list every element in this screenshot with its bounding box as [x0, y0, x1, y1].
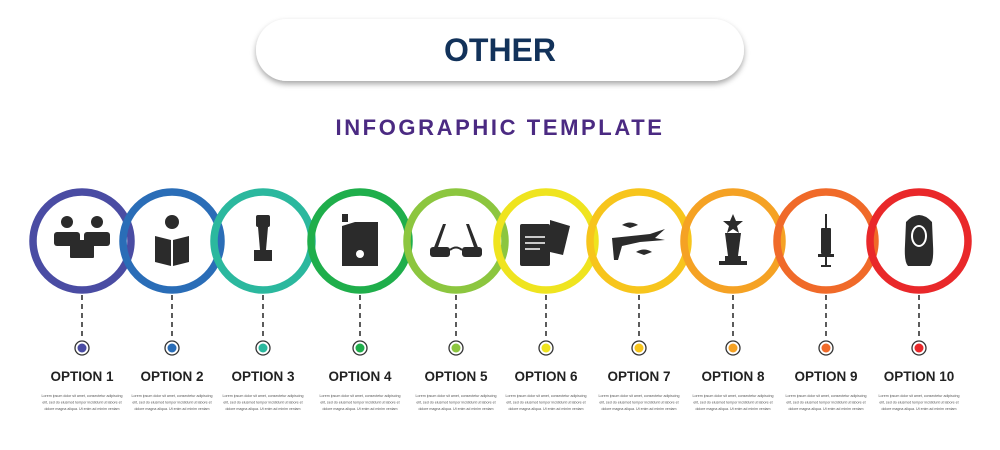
option 3: dolore magna aliqua. Ut enim ad minim veniam: [225, 407, 301, 411]
option 8: [684, 192, 782, 411]
option 2: dolore magna aliqua. Ut enim ad minim veniam: [134, 407, 210, 411]
option 9: elit, sed do eiusmod tempor incididunt ut labore et: [786, 400, 866, 404]
icon: birds on branch: [612, 222, 665, 260]
icon: fuel can: [342, 214, 378, 266]
option 5: elit, sed do eiusmod tempor incididunt ut labore et: [416, 400, 496, 404]
option 5: [407, 192, 505, 411]
option 7: dolore magna aliqua. Ut enim ad minim veniam: [601, 407, 677, 411]
option 2: OPTION 2: [140, 369, 204, 384]
icon: glasses: [430, 224, 482, 257]
option 7: elit, sed do eiusmod tempor incididunt ut labore et: [599, 400, 679, 404]
option 3: elit, sed do eiusmod tempor incididunt ut labore et: [223, 400, 303, 404]
option 1: Lorem ipsum dolor sit amet, consectetur adipiscing: [42, 394, 122, 398]
option 10: elit, sed do eiusmod tempor incididunt ut labore et: [879, 400, 959, 404]
option 2: elit, sed do eiusmod tempor incididunt ut labore et: [132, 400, 212, 404]
option 10: dolore magna aliqua. Ut enim ad minim veniam: [881, 407, 957, 411]
subtitle: INFOGRAPHIC TEMPLATE: [335, 115, 665, 140]
icon: person reading: [155, 215, 189, 266]
option 6: Lorem ipsum dolor sit amet, consectetur adipiscing: [506, 394, 586, 398]
option 3: OPTION 3: [231, 369, 295, 384]
option 9: [777, 192, 875, 411]
icon: hijab: [905, 215, 933, 266]
option 8: elit, sed do eiusmod tempor incididunt ut labore et: [693, 400, 773, 404]
option 7: OPTION 7: [607, 369, 671, 384]
option 9: Lorem ipsum dolor sit amet, consectetur adipiscing: [786, 394, 866, 398]
title pill: [256, 19, 744, 81]
option 4: OPTION 4: [328, 369, 392, 384]
option 6: dolore magna aliqua. Ut enim ad minim veniam: [508, 407, 584, 411]
option 8: Lorem ipsum dolor sit amet, consectetur adipiscing: [693, 394, 773, 398]
option 4: elit, sed do eiusmod tempor incididunt ut labore et: [320, 400, 400, 404]
option 4: dolore magna aliqua. Ut enim ad minim veniam: [322, 407, 398, 411]
option 8: OPTION 8: [701, 369, 765, 384]
option 10: Lorem ipsum dolor sit amet, consectetur adipiscing: [879, 394, 959, 398]
option 4: Lorem ipsum dolor sit amet, consectetur adipiscing: [320, 394, 400, 398]
option 9: OPTION 9: [794, 369, 858, 384]
option 2: Lorem ipsum dolor sit amet, consectetur adipiscing: [132, 394, 212, 398]
option 5: Lorem ipsum dolor sit amet, consectetur adipiscing: [416, 394, 496, 398]
icon: note cards: [520, 220, 570, 266]
icon: stamp: [254, 215, 272, 261]
option 4: [311, 192, 409, 411]
icon: syringe: [818, 214, 834, 267]
option 3: [214, 192, 312, 411]
option 6: OPTION 6: [514, 369, 578, 384]
title pill: OTHER: [444, 32, 556, 68]
option 1: dolore magna aliqua. Ut enim ad minim veniam: [44, 407, 120, 411]
option 8: dolore magna aliqua. Ut enim ad minim veniam: [695, 407, 771, 411]
option 7: [590, 192, 688, 411]
option 3: Lorem ipsum dolor sit amet, consectetur adipiscing: [223, 394, 303, 398]
option 7: Lorem ipsum dolor sit amet, consectetur adipiscing: [599, 394, 679, 398]
option 6: elit, sed do eiusmod tempor incididunt ut labore et: [506, 400, 586, 404]
icon: star trophy: [719, 214, 747, 265]
option 1: [33, 192, 131, 411]
option 5: OPTION 5: [424, 369, 488, 384]
option 10: [870, 192, 968, 411]
option 5: dolore magna aliqua. Ut enim ad minim veniam: [418, 407, 494, 411]
icon: business people: [54, 216, 110, 258]
option 9: dolore magna aliqua. Ut enim ad minim veniam: [788, 407, 864, 411]
option 10: OPTION 10: [884, 369, 954, 384]
option 2: [123, 192, 221, 411]
option 1: elit, sed do eiusmod tempor incididunt ut labore et: [42, 400, 122, 404]
option 6: [497, 192, 595, 411]
option 1: OPTION 1: [50, 369, 114, 384]
